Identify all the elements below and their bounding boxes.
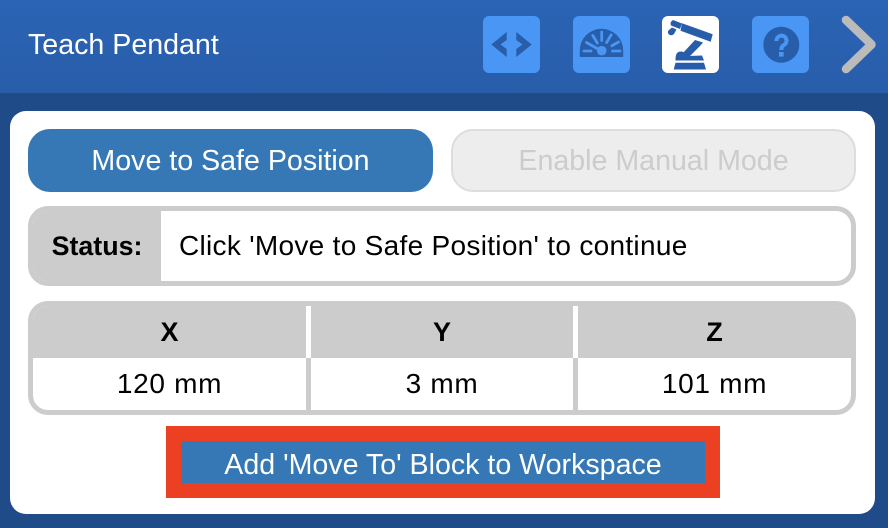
button: Enable Manual Mode (disabled): [451, 129, 856, 192]
Y value: 3 mm: [406, 368, 478, 399]
icon: robot arm (active): [662, 16, 719, 73]
icon: speedometer: [573, 16, 630, 73]
highlighted button: Add Move To Block: Add 'Move To' Block to Workspace: [224, 449, 662, 481]
header bar: [0, 0, 888, 93]
header divider: [306, 306, 311, 358]
X header: X: [160, 316, 178, 346]
cell divider: [573, 358, 578, 410]
status label: [33, 211, 161, 281]
status bar: [28, 206, 856, 286]
header row: [33, 306, 851, 358]
highlighted button: Add Move To Block: [166, 426, 720, 498]
main panel: [10, 111, 875, 514]
title: Teach Pendant: [28, 29, 219, 61]
status message: Click 'Move to Safe Position' to continue: [179, 230, 688, 261]
button: Enable Manual Mode (disabled): Enable Manual Mode: [518, 145, 789, 177]
header divider: [573, 306, 578, 358]
icon: help: [752, 16, 809, 73]
Y header: Y: [433, 316, 451, 346]
X value: 120 mm: [117, 368, 222, 399]
cell divider: [306, 358, 311, 410]
Z header: Z: [706, 316, 723, 346]
icon: code: [483, 16, 540, 73]
icon: chevron arrow: [842, 16, 876, 74]
button: Move to Safe Position: Move to Safe Position: [91, 145, 370, 177]
Z value: 101 mm: [662, 368, 767, 399]
position table: [28, 301, 856, 415]
status label: Status:: [52, 230, 142, 260]
button: Move to Safe Position: [28, 129, 433, 192]
